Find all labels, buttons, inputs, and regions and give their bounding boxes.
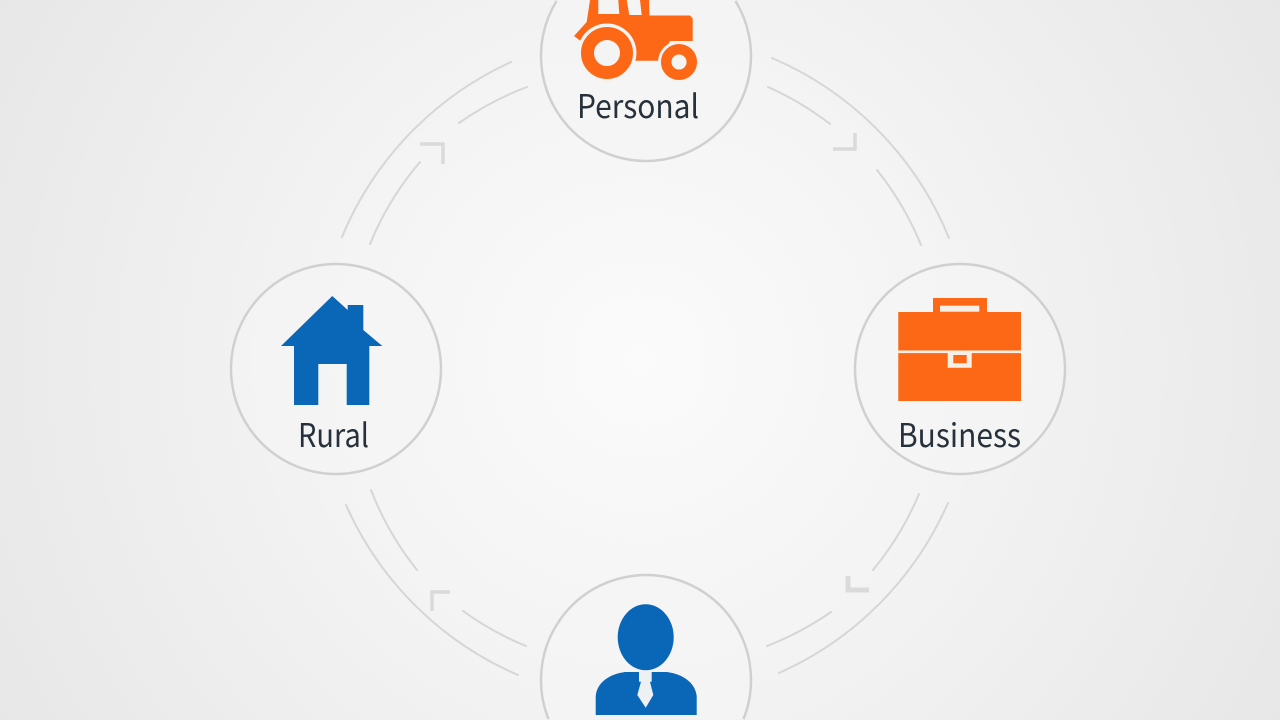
- label: Rural: Rural: [298, 410, 369, 457]
- label: Business: Business: [898, 410, 1021, 457]
- icon: tractor: [574, 0, 700, 83]
- icon: businessperson: [596, 604, 697, 715]
- node: Business: [855, 264, 1065, 474]
- label: Personal: Personal: [577, 81, 699, 128]
- node: Personal: [541, 0, 751, 161]
- icon: house: [281, 296, 382, 405]
- arrow: top right, Personal to Business: [768, 58, 949, 245]
- arrow: bottom left, person to Rural: [346, 490, 526, 675]
- arrow: top left, Rural to Personal: [342, 62, 527, 244]
- node: person: [541, 575, 751, 719]
- node: Rural: [231, 264, 441, 474]
- arrow: bottom right, Business to person: [767, 494, 948, 673]
- icon: briefcase: [898, 298, 1021, 401]
